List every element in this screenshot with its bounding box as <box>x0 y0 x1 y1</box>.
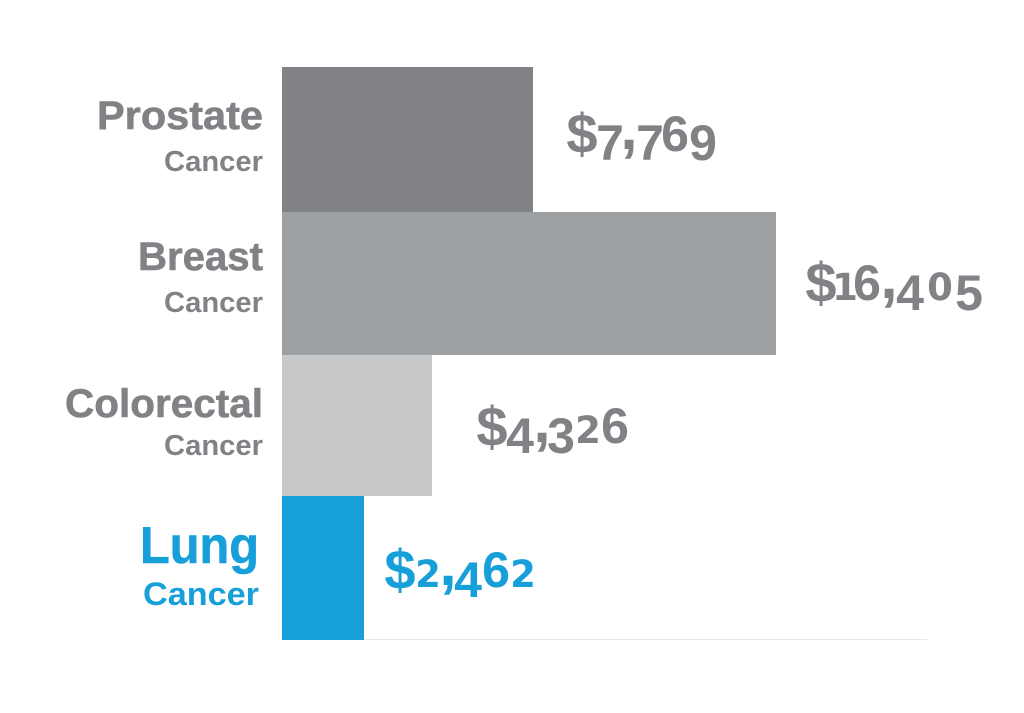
label: colorectal <box>65 382 263 462</box>
bar: breast <box>282 212 776 355</box>
value: lung: 2 <box>510 553 536 596</box>
value: colorectal: 3 <box>547 408 575 464</box>
label: breast <box>138 235 263 319</box>
label: colorectal: Colorectal <box>65 382 263 426</box>
value: lung: , <box>439 530 457 599</box>
label: prostate: Prostate <box>97 94 263 138</box>
value: lung: 6 <box>482 542 510 598</box>
value: colorectal: 2 <box>575 409 601 452</box>
sublabel: lung cancer: Cancer <box>143 576 259 612</box>
label: lung: Lung <box>140 517 259 575</box>
value: prostate: 7 <box>636 115 664 171</box>
value: lung: 4 <box>454 552 482 608</box>
value: colorectal: 6 <box>601 398 629 454</box>
sublabel: prostate cancer: Cancer <box>164 146 263 178</box>
value: breast <box>805 243 983 321</box>
value: lung: 2 <box>415 553 441 596</box>
label: lung <box>140 517 259 612</box>
value: colorectal: , <box>533 387 551 456</box>
bar: colorectal <box>282 355 432 496</box>
value: prostate <box>566 94 717 171</box>
bar: lung <box>282 496 364 640</box>
value: breast: 0 <box>927 266 953 309</box>
label: breast: Breast <box>138 235 263 279</box>
baseline axis <box>282 639 927 640</box>
bar: prostate <box>282 67 533 212</box>
value: prostate: 9 <box>689 115 717 171</box>
value: breast: 4 <box>896 265 924 321</box>
value: prostate: 7 <box>596 115 624 171</box>
label: prostate <box>97 94 263 178</box>
value: breast: 5 <box>955 265 983 321</box>
value: breast: , <box>880 243 898 312</box>
value: prostate: 6 <box>661 106 689 162</box>
value: breast: 1 <box>832 266 858 309</box>
value: colorectal <box>476 387 629 464</box>
value: breast: 6 <box>853 255 881 311</box>
value: lung: $ <box>384 538 416 601</box>
value: prostate: $ <box>566 102 598 165</box>
sublabel: colorectal cancer: Cancer <box>164 430 263 462</box>
sublabel: breast cancer: Cancer <box>164 287 263 319</box>
value: colorectal: 4 <box>506 408 534 464</box>
value: breast: $ <box>805 251 837 314</box>
value: prostate: , <box>620 94 638 163</box>
value: lung <box>384 530 536 608</box>
value: colorectal: $ <box>476 395 508 458</box>
